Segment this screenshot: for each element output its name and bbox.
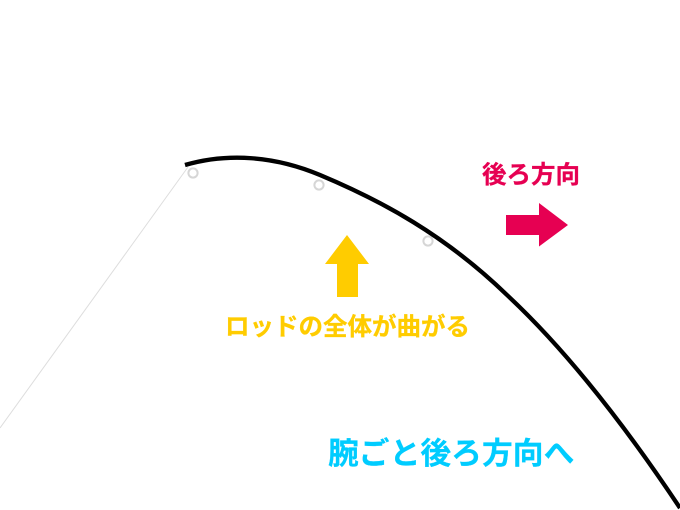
guide ring 2: [314, 180, 324, 190]
label: whole arm moves backward: 腕ごと後ろ方向へ: [328, 436, 574, 471]
arm line: [0, 167, 188, 428]
arrow: backward direction: [506, 203, 568, 246]
label: backward direction: 後ろ方向: [482, 161, 580, 189]
fishing rod curve: [185, 158, 680, 508]
arrow: rod bends upward: [325, 235, 369, 297]
guide ring 3: [423, 236, 433, 246]
guide ring 1: [188, 168, 198, 178]
label: whole rod bends: ロッドの全体が曲がる: [225, 312, 470, 341]
